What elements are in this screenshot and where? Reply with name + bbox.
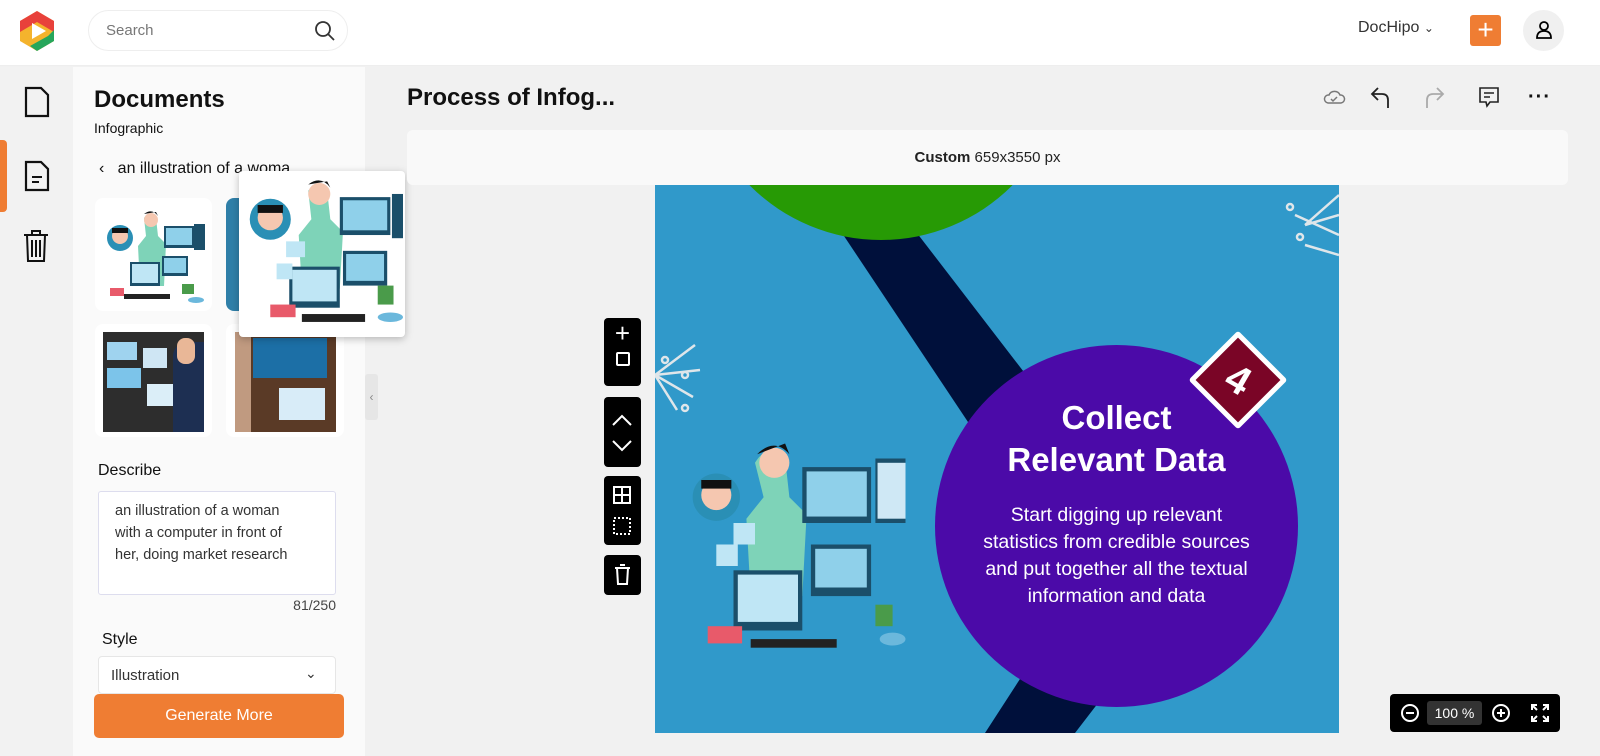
green circle xyxy=(696,0,1066,240)
illustration: woman at computers xyxy=(692,444,906,648)
toolbar icons xyxy=(1324,86,1551,108)
active marker xyxy=(0,140,7,212)
add/duplicate group: + xyxy=(615,318,630,348)
number badge xyxy=(1189,331,1287,429)
style select xyxy=(98,656,336,694)
search box xyxy=(88,10,348,51)
search box: Search xyxy=(106,22,154,39)
icon: redo xyxy=(1426,88,1444,108)
left icon rail xyxy=(0,67,73,756)
step description: and put together all the textual xyxy=(985,558,1248,580)
thumbnail 2 xyxy=(226,198,344,311)
style label: Style xyxy=(102,631,138,648)
step description: information and data xyxy=(1028,585,1205,607)
style select: Illustration xyxy=(111,667,179,684)
collapse handle xyxy=(365,374,378,420)
icon: document xyxy=(24,86,50,118)
breadcrumb: ‹ an illustration of a woma xyxy=(99,160,290,177)
floating toolbar xyxy=(604,318,641,595)
button: generate more: Generate More xyxy=(165,707,273,724)
icon: more: ··· xyxy=(1528,86,1551,108)
sidebar panel xyxy=(73,67,365,756)
counter: 81/250 xyxy=(293,597,336,613)
thumbnail 1 xyxy=(95,198,212,311)
textarea xyxy=(98,491,336,595)
size bar xyxy=(407,130,1568,185)
add button: + xyxy=(1477,14,1494,45)
delete xyxy=(604,555,641,595)
step heading: Collect xyxy=(1061,399,1172,436)
step heading: Relevant Data xyxy=(1007,441,1226,478)
button: generate more xyxy=(94,694,344,738)
icon: comment xyxy=(1479,87,1499,108)
account menu: DocHipo ⌄ xyxy=(1358,19,1434,36)
icon: document text xyxy=(24,160,50,192)
step circle xyxy=(935,345,1298,707)
collapse handle: ‹ xyxy=(370,390,374,404)
icon: cloud xyxy=(1324,90,1346,104)
dark band xyxy=(810,185,1135,733)
step heading xyxy=(1007,399,1226,478)
popup preview xyxy=(239,171,405,337)
heading: Documents xyxy=(94,86,225,113)
step description xyxy=(983,504,1250,607)
zoom control xyxy=(1390,694,1560,732)
size bar: Custom 659x3550 px xyxy=(915,149,1060,166)
canvas xyxy=(655,185,1339,733)
snowflake decorations xyxy=(655,195,1339,411)
thumbnail 4 xyxy=(226,324,344,437)
add button xyxy=(1470,15,1501,46)
style select: ⌄ xyxy=(305,665,317,681)
subheading: Infographic xyxy=(94,120,163,136)
icon: trash xyxy=(24,230,48,262)
grid group xyxy=(604,476,641,545)
add/duplicate group xyxy=(604,318,641,386)
step description: statistics from credible sources xyxy=(983,531,1250,553)
thumbnail 3 xyxy=(95,324,212,437)
top bar xyxy=(0,0,1600,66)
number badge: 4 xyxy=(1217,355,1259,405)
document title: Process of Infog... xyxy=(407,84,615,111)
icon: undo xyxy=(1370,87,1389,108)
up/down group xyxy=(604,397,641,467)
describe label: Describe xyxy=(98,462,161,479)
textarea: an illustration of a woman with a computer in front of her, doing market research xyxy=(115,503,287,563)
zoom control: 100 % xyxy=(1435,705,1474,721)
step description: Start digging up relevant xyxy=(1011,504,1222,526)
user avatar xyxy=(1523,10,1564,51)
logo xyxy=(20,11,54,51)
